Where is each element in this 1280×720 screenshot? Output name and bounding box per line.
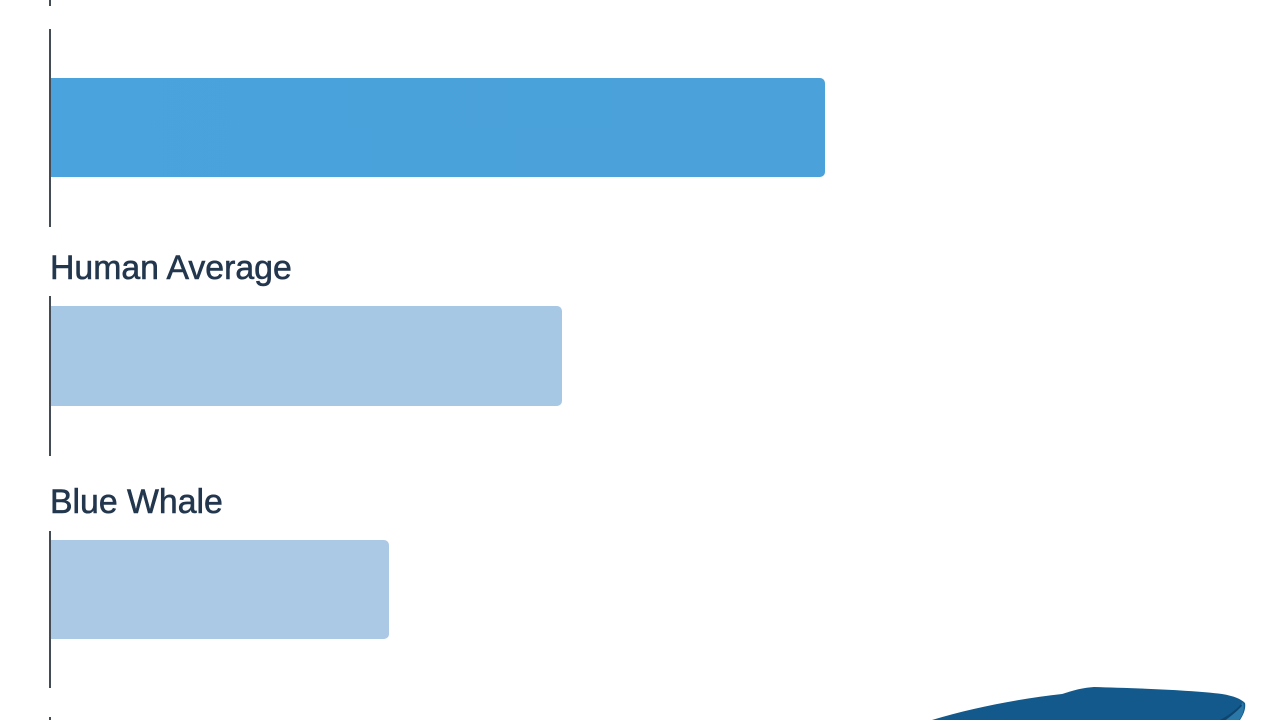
bar: Human Average (50, 306, 562, 406)
bar: top unlabelled value (50, 78, 825, 177)
icon: blue whale illustration cropped at bottom edge (932, 687, 1246, 720)
bar: Blue Whale (50, 540, 389, 638)
label: Blue Whale: Blue Whale (50, 483, 223, 521)
label: Human Average: Human Average (50, 249, 292, 287)
